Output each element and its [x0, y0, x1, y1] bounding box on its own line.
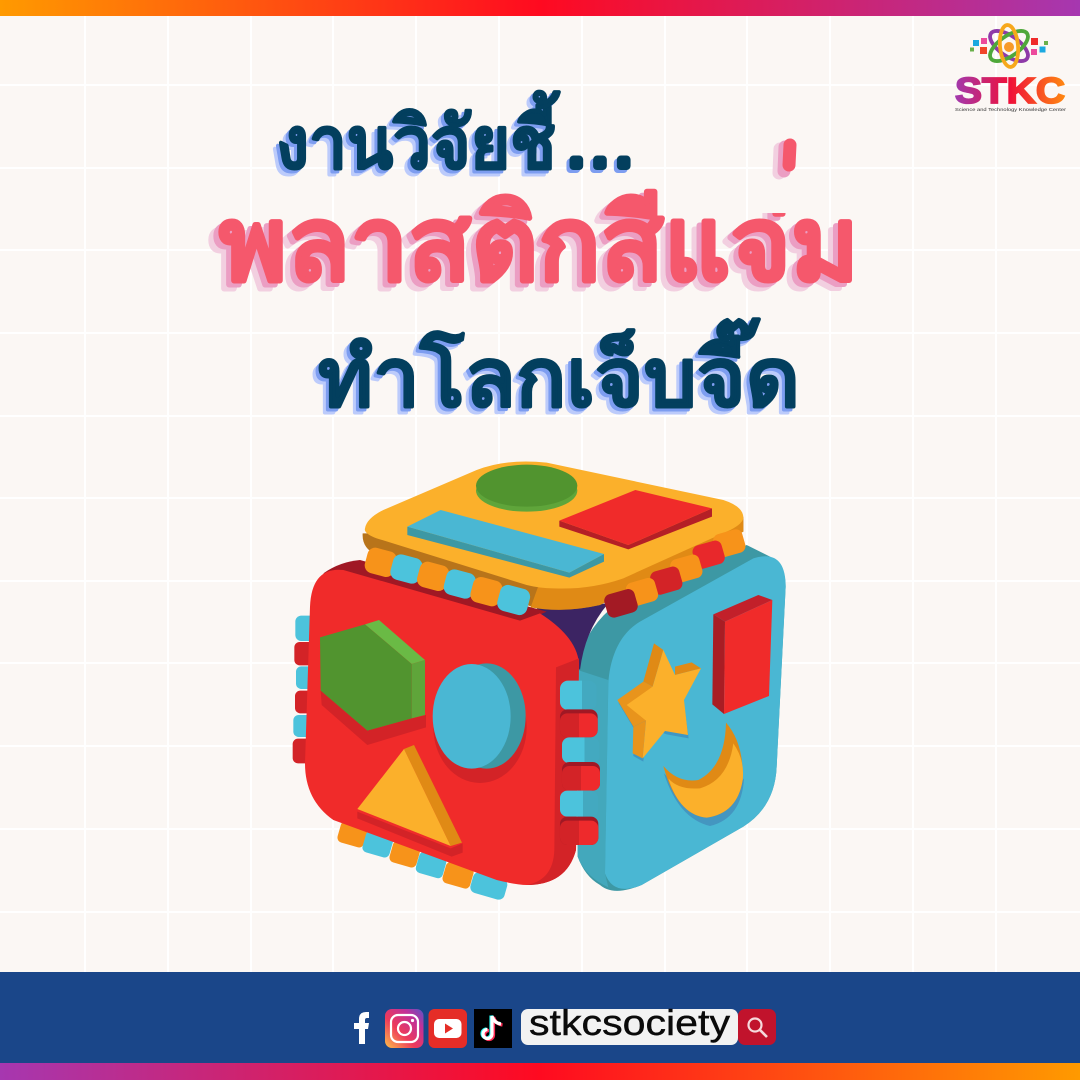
star — [617, 643, 701, 762]
illustration: shape sorter cube — [293, 461, 786, 901]
icon: facebook — [354, 1012, 369, 1044]
logo: STKC — [955, 24, 1066, 113]
search pill: stkcsociety — [529, 1002, 730, 1043]
logo tagline: Science and Technology Knowledge Center — [955, 107, 1066, 113]
icon: youtube — [428, 1009, 467, 1048]
heading line 2: พลาสติกสีแจ่ม — [219, 187, 859, 303]
heading line 1: งานวิจัยชี้ — [276, 91, 560, 184]
top square — [559, 490, 712, 549]
icon: search — [738, 1009, 776, 1045]
bottom gradient bar — [0, 1063, 1080, 1080]
icon: tiktok — [474, 1009, 512, 1048]
triangle — [357, 745, 463, 857]
heading line 3: ทำโลกเจ็บจี๊ด — [312, 325, 794, 430]
heading line 1: งานวิจัยชี้ — [270, 97, 554, 190]
heading line 1 — [270, 91, 639, 190]
heading line 3: ทำโลกเจ็บจี๊ด — [315, 322, 797, 427]
middle tiles — [560, 681, 600, 845]
icon: instagram — [385, 1009, 424, 1048]
tone mark on line 2 — [779, 145, 790, 173]
circle — [433, 663, 527, 783]
title — [209, 91, 859, 430]
footer band — [0, 972, 1080, 1063]
heading line 1: ... — [565, 115, 636, 182]
top left tiles — [363, 546, 532, 617]
red block — [712, 595, 772, 714]
blue right face — [578, 545, 786, 891]
left tiles — [293, 616, 316, 763]
red left face — [305, 560, 579, 885]
dark inner gap — [537, 603, 608, 670]
top circle — [476, 465, 577, 512]
top right tiles — [603, 528, 747, 619]
top yellow face — [363, 461, 743, 610]
heading line 2: พลาสติกสีแจ่ม — [209, 195, 849, 311]
top bar — [407, 510, 604, 578]
heading line 2: พลาสติกสีแจ่ม — [214, 191, 854, 307]
social row — [354, 1002, 776, 1048]
crescent moon — [663, 723, 744, 826]
hexagon — [320, 620, 426, 745]
icon: atom — [970, 24, 1048, 68]
heading line 1: ... — [568, 112, 639, 179]
bottom tiles — [336, 820, 509, 901]
heading line 1: งานวิจัยชี้ — [273, 94, 557, 187]
top gradient bar — [0, 0, 1080, 16]
heading line 3: ทำโลกเจ็บจี๊ด — [318, 319, 800, 424]
logo wordmark: STKC — [955, 70, 1065, 111]
